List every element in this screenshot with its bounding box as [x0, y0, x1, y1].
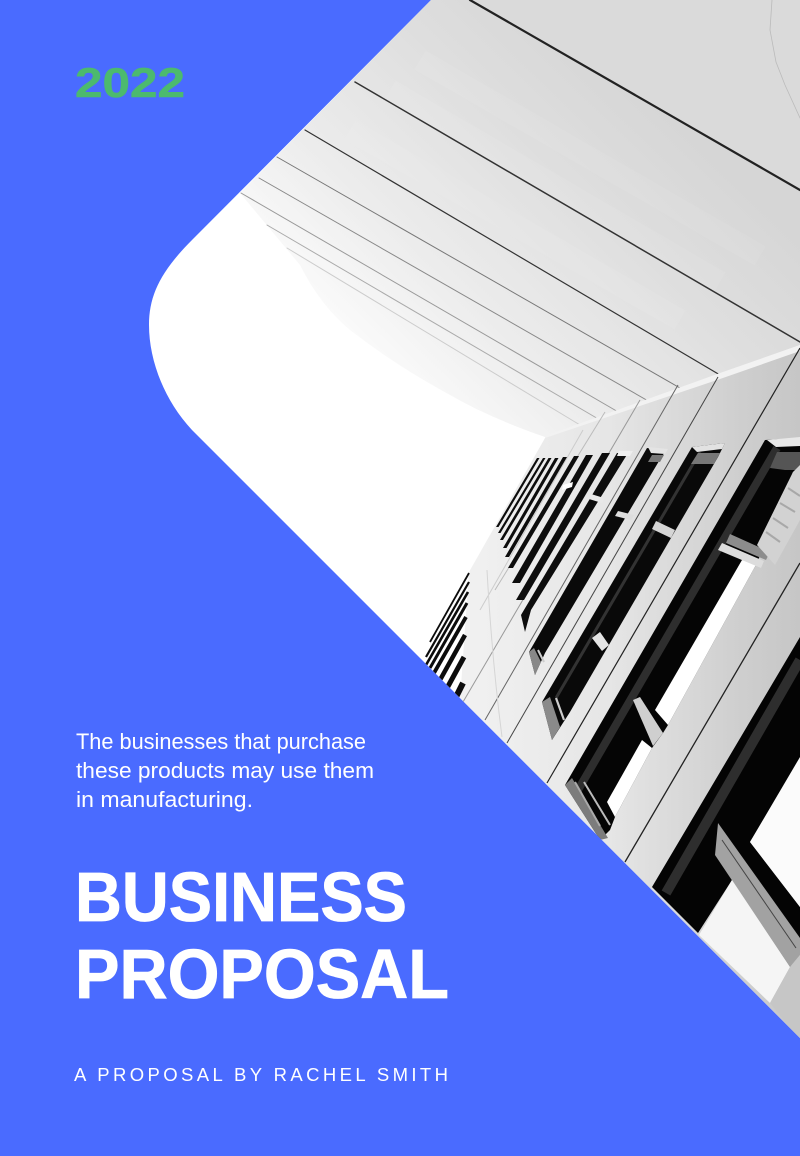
small upper windows — [496, 451, 633, 632]
intro paragraph — [76, 729, 374, 812]
title — [75, 858, 449, 1013]
ceiling slabs — [240, 0, 800, 442]
intro paragraph: in manufacturing. — [76, 787, 253, 812]
title: PROPOSAL — [75, 935, 449, 1013]
far-left window stripes — [426, 573, 469, 697]
window column 3 with glass — [565, 437, 800, 840]
window column 1 — [529, 447, 668, 675]
intro paragraph: these products may use them — [76, 758, 374, 783]
intro paragraph: The businesses that purchase — [76, 729, 366, 754]
year: 2022 — [75, 59, 185, 106]
photo: building — [140, 0, 800, 1060]
window column 4 with glass — [652, 637, 800, 1040]
author line: A PROPOSAL BY RACHEL SMITH — [74, 1064, 448, 1085]
title: BUSINESS — [75, 858, 407, 936]
facade — [460, 348, 800, 1040]
window column 2 — [542, 443, 725, 740]
